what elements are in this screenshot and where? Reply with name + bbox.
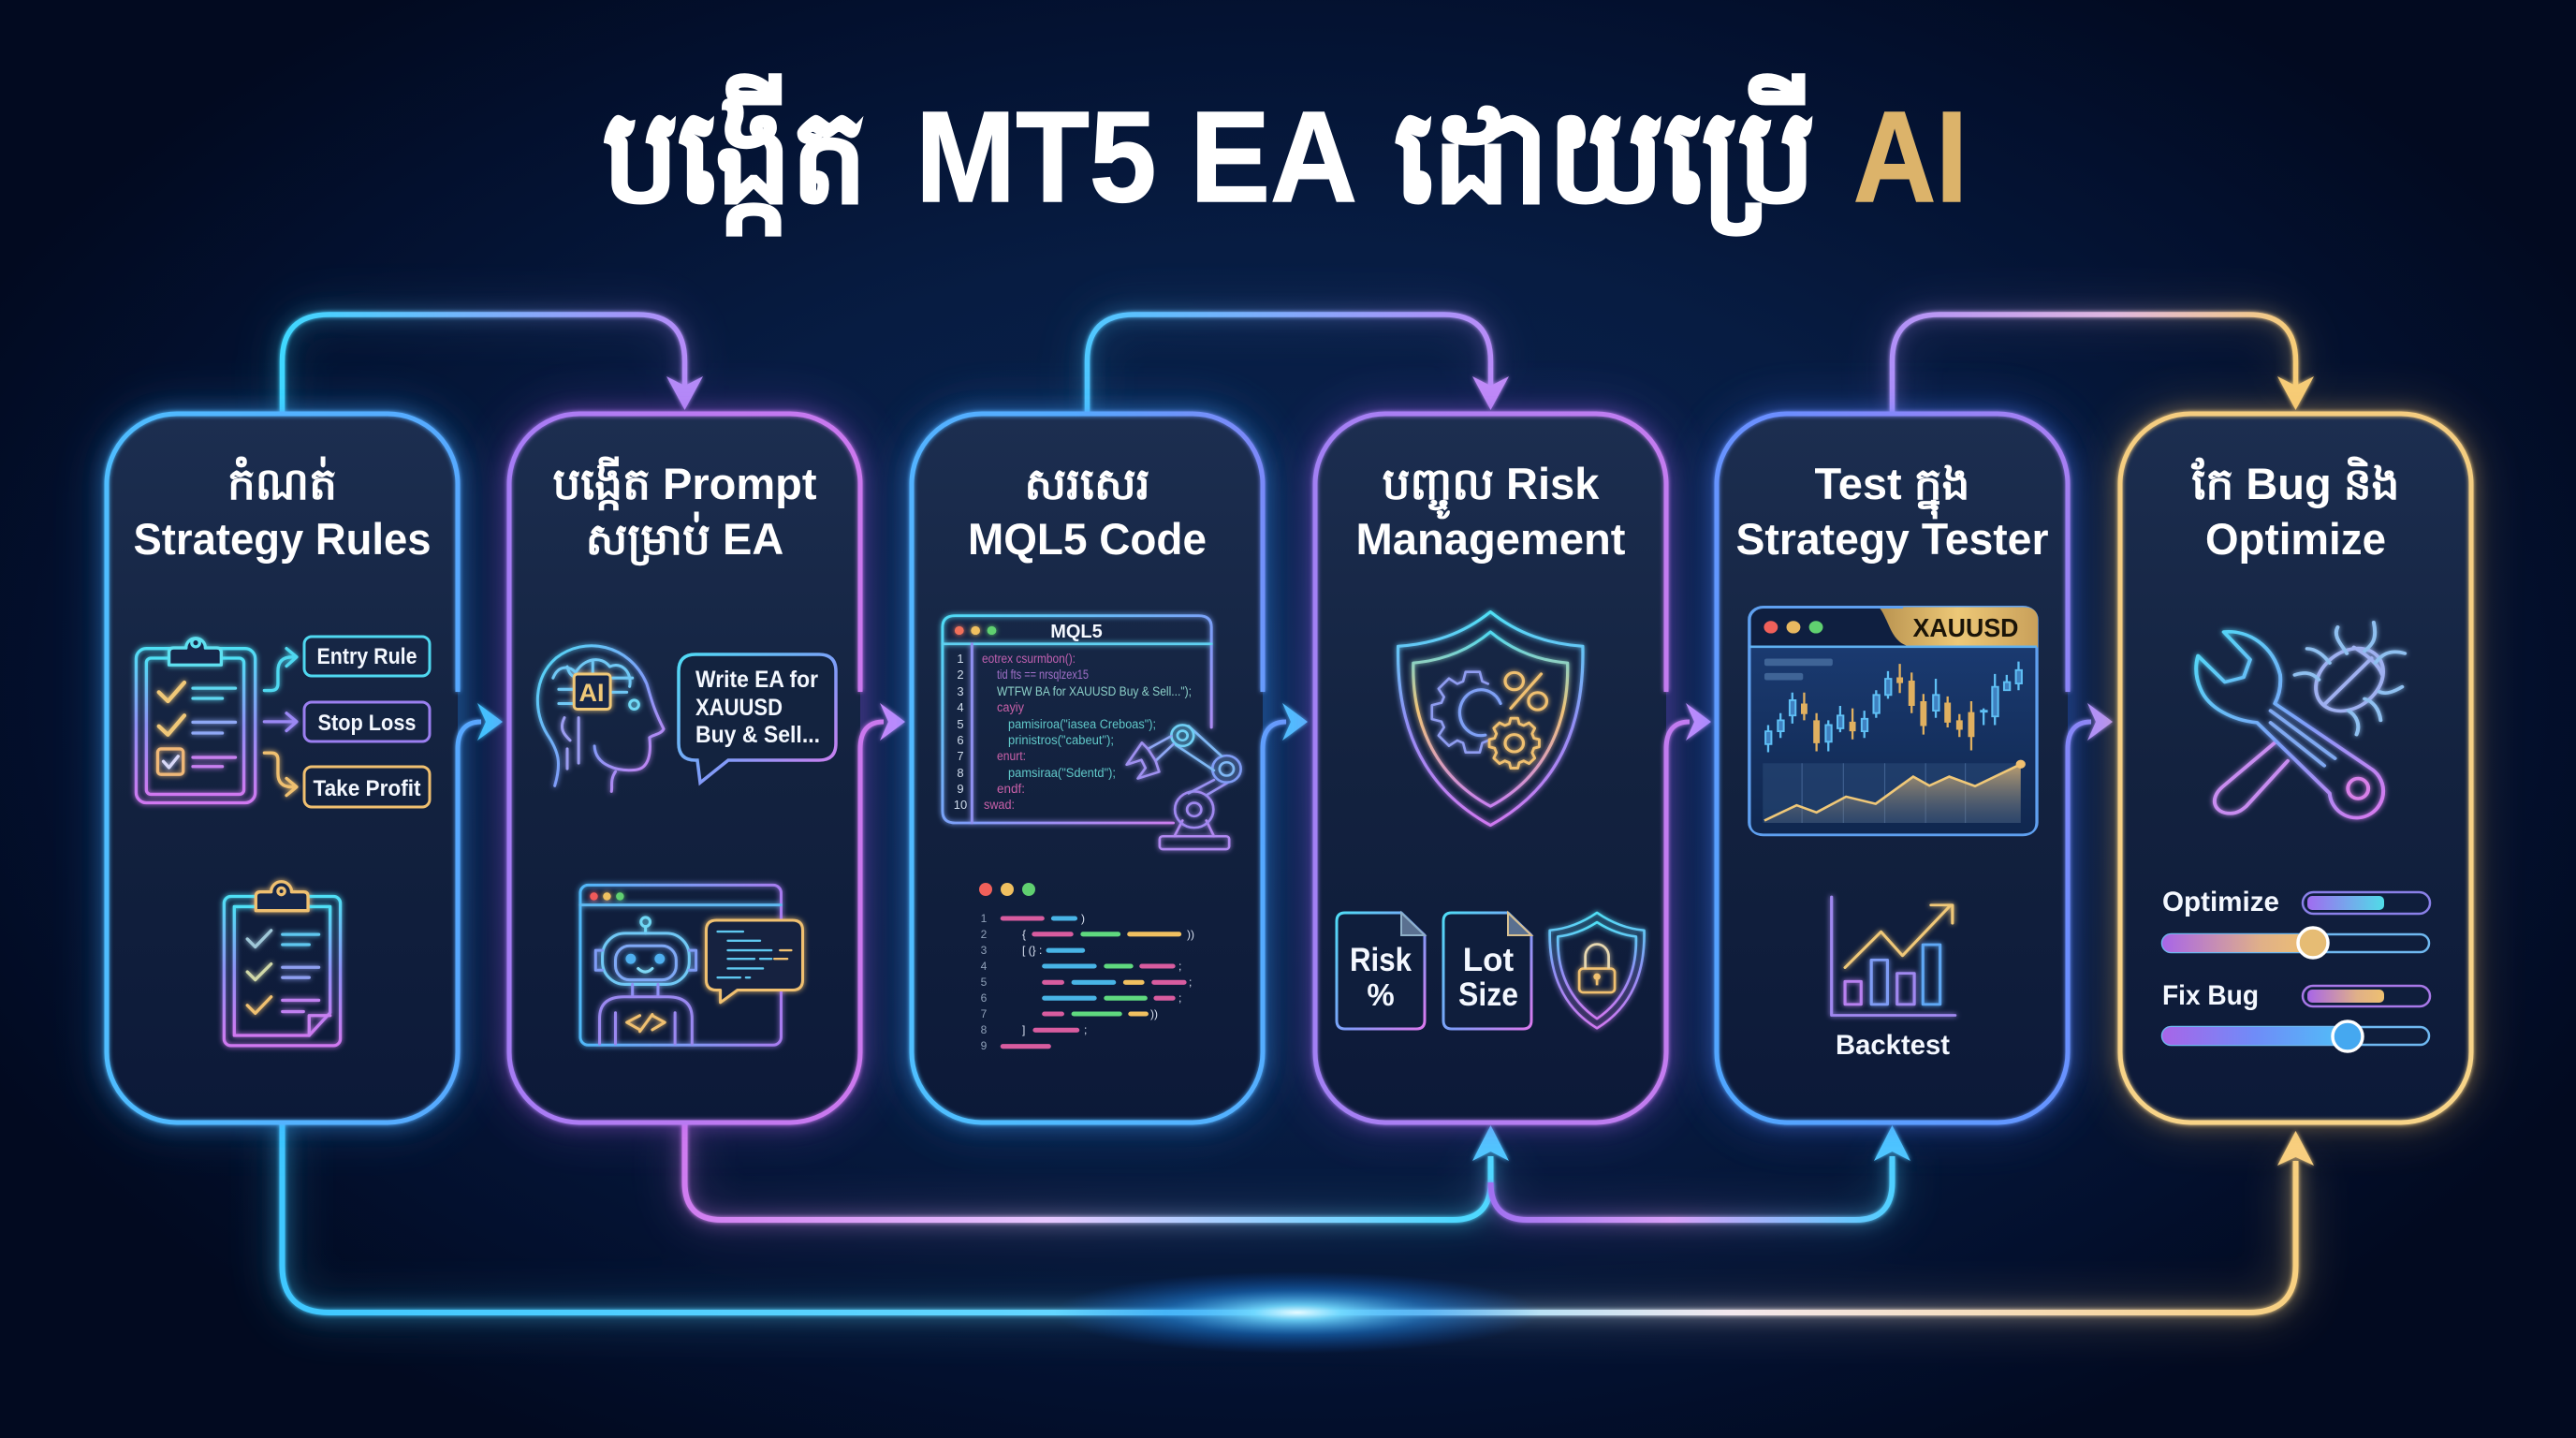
heading: Optimize [2205, 514, 2386, 564]
code listing: prinistros("cabeut"); [1008, 733, 1114, 747]
label: stop loss: Stop Loss [318, 711, 416, 736]
speech bubble: prompt [679, 654, 836, 783]
panel: step 1 strategy rules [107, 414, 503, 1123]
code listing: 5 [957, 717, 964, 731]
code line numbers and punctuation: 5 [981, 976, 988, 989]
flow arrows to rule labels [264, 649, 297, 796]
icon: robot in browser window [580, 885, 802, 1045]
code listing: tid fts == nrsqlzex15 [997, 668, 1089, 682]
code line numbers and punctuation: 4 [981, 960, 988, 973]
arrow: step 3 to step 4 [1282, 703, 1308, 741]
panel: step 6 fix bugs and optimize [2120, 414, 2471, 1123]
arrow: step 3 to step 4 over the top [1088, 315, 1509, 414]
code line numbers and punctuation: )) [1150, 1007, 1158, 1020]
code window title: MQL5 [1050, 622, 1103, 642]
heading [553, 456, 817, 566]
code listing: 4 [957, 700, 964, 714]
code listing: pamisiroa("iasea Creboas"); [1008, 717, 1156, 731]
label: stop loss [304, 702, 430, 741]
card: risk percent: % [1367, 977, 1395, 1012]
code listing: 9 [957, 782, 964, 796]
icon: wrench, screwdriver and bug [2196, 623, 2405, 818]
title: ដោយប្រើ [1395, 74, 1815, 236]
arrow: step 5 to step 6 over the top [1893, 315, 2314, 414]
code listing: WTFW BA for XAUUSD Buy & Sell..."); [997, 684, 1192, 698]
code line numbers and punctuation: { [1022, 928, 1026, 941]
code window frame [943, 616, 1211, 823]
code listing [954, 652, 1192, 812]
arrow: step 4 to step 5 along the bottom [1490, 1125, 1910, 1220]
code line numbers and punctuation: 8 [981, 1023, 988, 1036]
traffic-light dots [979, 883, 1035, 896]
arrow: step 2 to step 4 along the bottom [685, 1123, 1509, 1220]
panel: step 5 strategy tester [1717, 414, 2113, 1123]
heading: កែ Bug និង [2191, 456, 2399, 508]
arrow: step 2 to step 3 [880, 703, 905, 741]
code line numbers and punctuation: 6 [981, 991, 988, 1005]
title: បង្កើត [603, 74, 867, 236]
connectors glow layer [283, 315, 2295, 1313]
panel: step 2 prompt [509, 414, 905, 1123]
code listing: pamsiraa("Sdentd"); [1008, 766, 1116, 780]
heading: សម្រាប់ EA [586, 511, 783, 566]
heading [133, 456, 431, 564]
code listing: 7 [957, 749, 964, 763]
heading: បង្កើត Prompt [553, 456, 817, 511]
code listing: 2 [957, 668, 964, 682]
icon: shield with gears and percent [1398, 612, 1583, 826]
code listing: 6 [957, 733, 964, 747]
speech bubble: prompt: XAUUSD [695, 695, 783, 721]
code listing: 1 [957, 652, 964, 666]
code line numbers and punctuation: ; [1178, 960, 1181, 973]
heading [1735, 459, 2048, 564]
heading [968, 459, 1207, 564]
code listing: eotrex csurmbon(): [982, 652, 1076, 666]
icon: second clipboard [224, 882, 341, 1046]
arrow: step 5 to step 6 [2087, 703, 2113, 741]
arrow: step 1 to step 6 along the bottom [283, 1123, 2314, 1313]
tab label: XAUUSD [1913, 613, 2018, 642]
code line numbers and punctuation: 7 [981, 1007, 988, 1020]
chip label: AI [578, 679, 605, 707]
heading: Strategy Rules [133, 514, 431, 564]
window frame [1749, 607, 2038, 835]
abstract code bars [1003, 918, 1184, 1047]
code line numbers and punctuation: [ (} : [1022, 944, 1042, 957]
icon: main clipboard checklist [136, 638, 256, 803]
chart window: XAUUSD [1749, 607, 2038, 835]
heading: បញ្ចូល Risk [1383, 459, 1600, 520]
code line numbers and punctuation: 2 [981, 928, 988, 941]
speech bubble: prompt: Write EA for [695, 667, 818, 693]
code listing: cayiy [997, 700, 1024, 714]
arrow: step 4 to step 5 [1686, 703, 1711, 741]
label: entry rule: Entry Rule [316, 644, 417, 669]
code listing: 10 [954, 798, 967, 812]
code line numbers and punctuation: ] [1022, 1023, 1025, 1036]
code listing: 8 [957, 766, 964, 780]
heading [2191, 456, 2399, 564]
panel: step 4 risk management [1315, 414, 1711, 1123]
slider group: optimize [2162, 887, 2430, 958]
code listing: endf: [997, 782, 1025, 796]
card: risk percent [1337, 913, 1425, 1029]
card: risk percent: Risk [1350, 942, 1412, 978]
code line numbers and punctuation: 1 [981, 912, 988, 925]
label: take profit: Take Profit [313, 776, 421, 801]
card: lot size: Lot [1463, 942, 1515, 978]
arrow: step 1 to step 2 over the top [283, 315, 703, 414]
icon: AI head [537, 646, 664, 791]
icon: bar chart with rising arrow [1832, 897, 1955, 1016]
card: lot size: Size [1458, 976, 1518, 1013]
heading: MQL5 Code [968, 514, 1207, 564]
heading [1355, 459, 1626, 564]
code line numbers and punctuation: ; [1084, 1023, 1087, 1036]
title [603, 74, 1968, 236]
heading: កំណត់ [227, 456, 337, 508]
speech bubble: prompt: Buy & Sell... [695, 722, 820, 748]
code line numbers and punctuation: 3 [981, 944, 988, 957]
title: AI [1853, 85, 1968, 229]
card: lot size [1443, 913, 1531, 1029]
title: MT5 EA [915, 85, 1357, 229]
icon: robot arm [1127, 725, 1241, 849]
heading: Management [1355, 514, 1626, 564]
slider group: fix bug [2162, 980, 2430, 1051]
heading: Strategy Tester [1735, 514, 2048, 564]
code line numbers and punctuation: 9 [981, 1039, 988, 1052]
label: backtest: Backtest [1836, 1030, 1950, 1061]
slider group: optimize: Optimize [2162, 887, 2279, 917]
code line numbers and punctuation: ) [1081, 912, 1085, 925]
code line numbers and punctuation: ; [1189, 976, 1192, 989]
code listing: swad: [984, 798, 1015, 812]
candlesticks [1765, 662, 2022, 753]
code listing: enurt: [997, 749, 1026, 763]
bottom light flare [1054, 1271, 1541, 1354]
label: take profit [304, 767, 430, 807]
icon: lock shield [1550, 913, 1645, 1028]
equity area chart [1763, 760, 2026, 823]
code listing: 3 [957, 684, 964, 698]
heading: សរសេរ [1024, 459, 1150, 508]
label: entry rule [304, 637, 430, 676]
code line numbers and punctuation: ; [1178, 991, 1181, 1005]
panel: step 3 MQL5 code [912, 414, 1308, 1123]
code line numbers and punctuation [981, 912, 1194, 1052]
arrow: step 1 to step 2 [477, 703, 503, 741]
slider group: fix bug: Fix Bug [2162, 980, 2259, 1011]
heading: Test ក្នុង [1815, 459, 1969, 520]
code line numbers and punctuation: )) [1187, 928, 1194, 941]
